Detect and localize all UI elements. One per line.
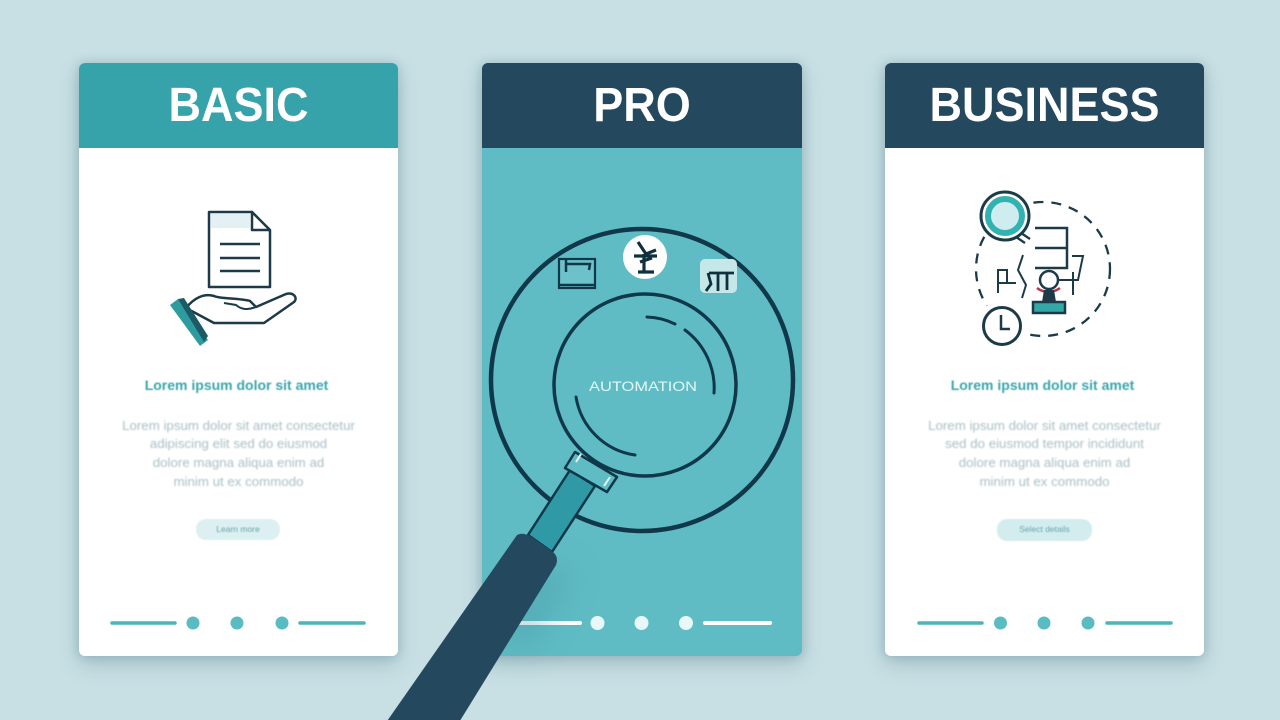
heading: basic: BASIC <box>168 77 308 132</box>
text block <box>122 418 356 489</box>
button: Learn more <box>216 524 260 534</box>
label: automation: AUTOMATION <box>589 379 697 394</box>
button <box>997 519 1092 541</box>
inner lens ring <box>554 294 736 476</box>
text block: Lorem ipsum dolor sit amet consectetur <box>928 418 1161 432</box>
panel: business plan <box>885 63 1204 656</box>
pagination indicator <box>110 616 366 630</box>
heading: business <box>885 63 1204 148</box>
outer lens ring <box>491 229 793 531</box>
text block <box>928 418 1162 489</box>
text block: dolore magna aliqua enim ad <box>153 455 324 470</box>
text block: sed do eiusmod tempor incididunt <box>945 436 1144 451</box>
panel: basic plan <box>79 63 398 656</box>
panel: pro plan <box>482 63 802 656</box>
pagination indicator <box>519 616 772 630</box>
text block: adipiscing elit sed do eiusmod <box>150 436 327 451</box>
heading: pro <box>482 63 802 148</box>
icon: robot arm <box>700 259 737 293</box>
text block: minim ut ex commodo <box>979 474 1110 489</box>
heading: basic <box>79 63 398 148</box>
subheading: Lorem ipsum dolor sit amet <box>145 377 328 393</box>
subheading: Lorem ipsum dolor sit amet <box>951 377 1134 393</box>
icon: hand holding document <box>170 210 297 346</box>
text block: dolore magna aliqua enim ad <box>959 455 1130 470</box>
text block: Lorem ipsum dolor sit amet consectetur <box>122 418 355 432</box>
text block: minim ut ex commodo <box>173 474 304 489</box>
icon: workflow automation <box>974 190 1112 346</box>
heading: business: BUSINESS <box>929 77 1160 132</box>
magnifier handle <box>385 452 617 720</box>
icon: browser window <box>559 258 595 288</box>
heading: pro: PRO <box>593 77 691 132</box>
icon: gear badge <box>623 235 667 279</box>
button: Select details <box>1019 524 1070 534</box>
button <box>196 519 280 540</box>
pagination indicator <box>917 616 1173 630</box>
